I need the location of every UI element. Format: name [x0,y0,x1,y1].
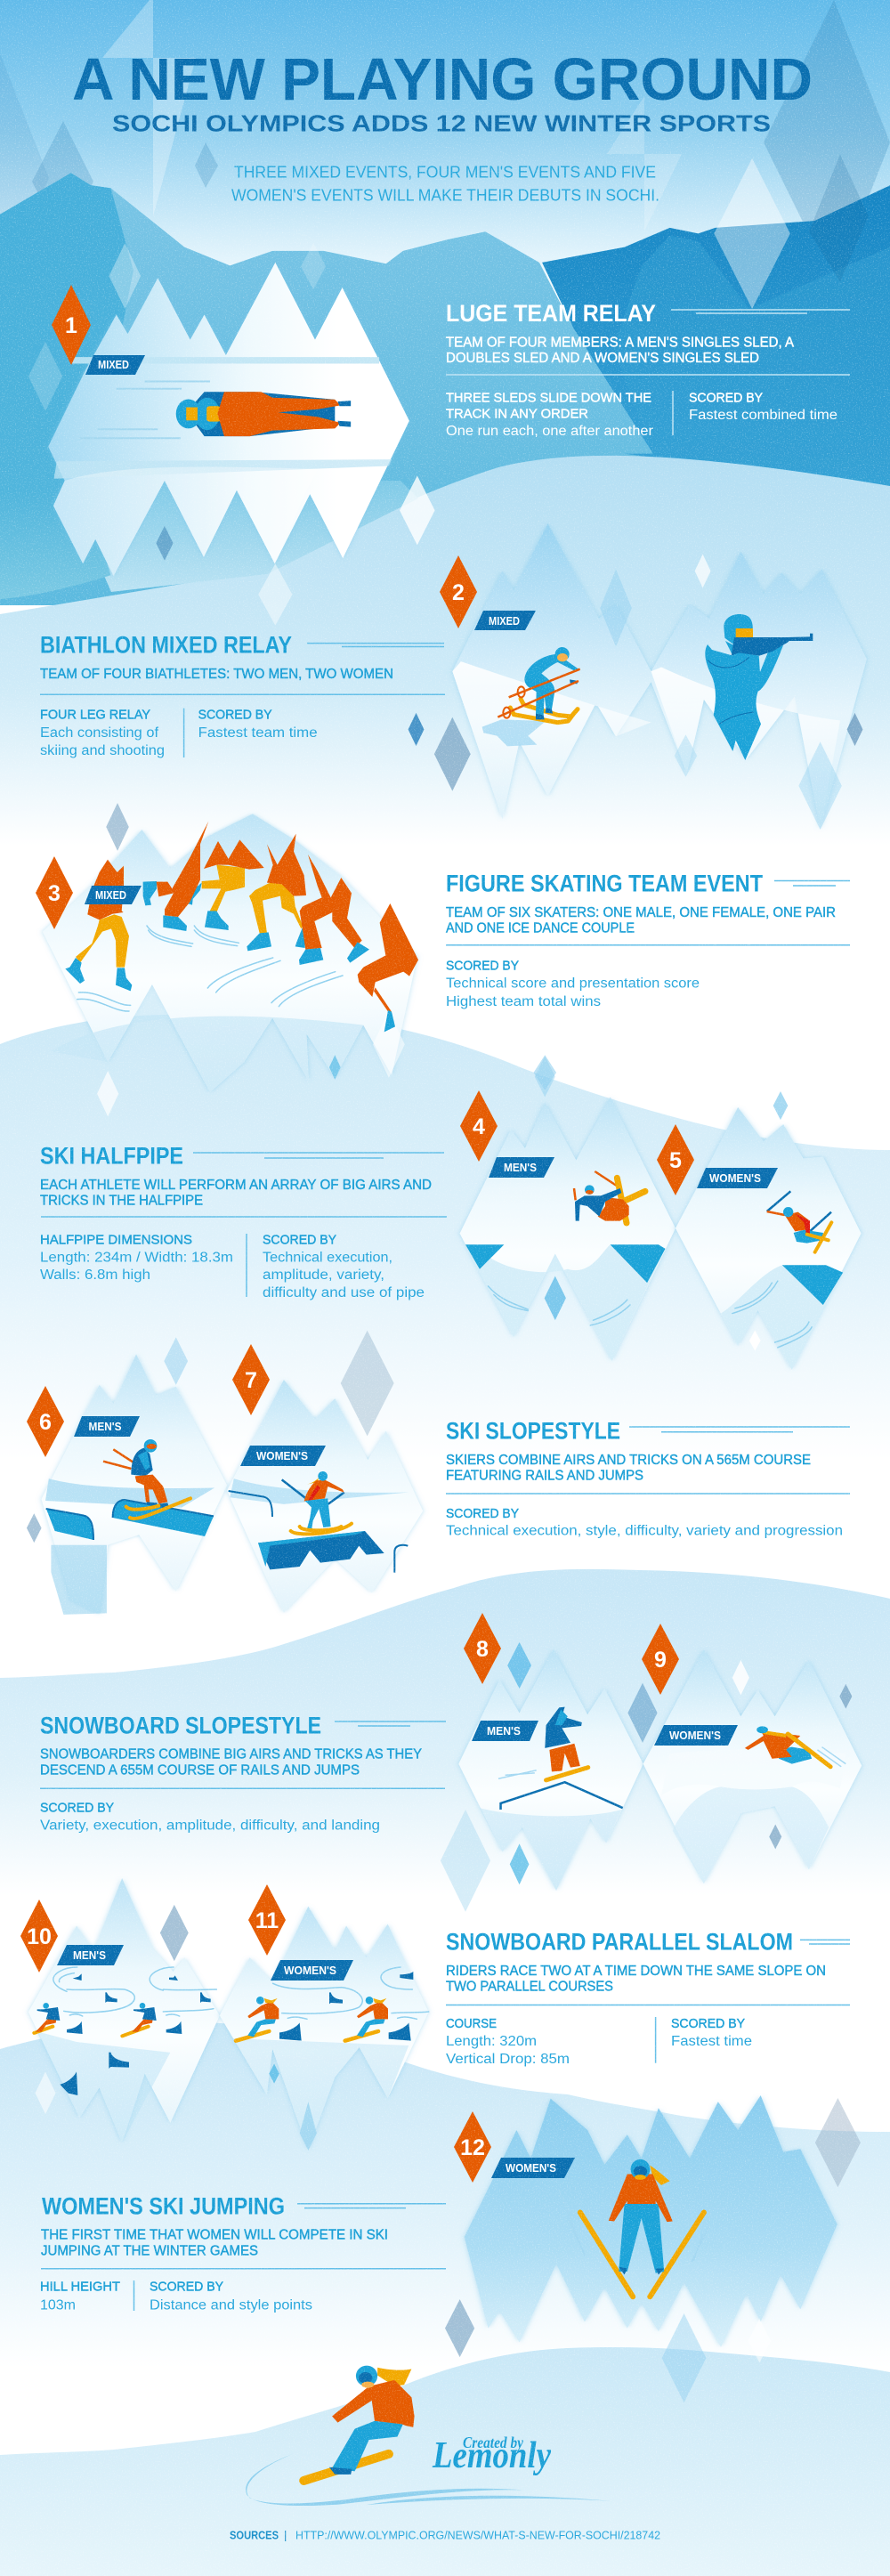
rank badges: 12 [460,2135,485,2160]
panel text: snowboard slopestyle [40,1713,446,1834]
panel text: snowboard slopestyle: DESCEND A 655M COURSE OF RAILS AND JUMPS [40,1762,360,1778]
illustration: snowboard slopestyle panels [441,1642,862,1912]
panel text: biathlon mixed relay: SCORED BY [198,708,272,723]
logo: created by lemonly: Created by [463,2434,524,2451]
panel text: snowboard parallel slalom: Fastest time [671,2034,752,2049]
icon: slalom riders men [34,2003,157,2036]
category tags: MEN'S [73,1948,106,1962]
rank badges [20,285,694,2183]
icon: slopestyle rails [46,1491,408,1573]
panel text: luge team relay: Fastest combined time [689,408,837,423]
category tags [57,355,778,2178]
panel text: women's ski jumping: 103m [40,2297,76,2313]
rank badges: 5 [669,1148,682,1173]
panel text: figure skating team event [446,870,850,1009]
panel text: biathlon mixed relay: FOUR LEG RELAY [40,708,150,723]
icon: luge athlete [176,392,351,436]
panel text: luge team relay: TRACK IN ANY ORDER [446,406,588,422]
rank badges: 3 [48,881,61,906]
rank badges: 4 [473,1114,485,1139]
icon: six figure skaters [65,822,418,1032]
panel text: ski halfpipe: SKI HALFPIPE [40,1143,183,1170]
rank badges: 6 [39,1410,52,1435]
panel text: luge team relay: LUGE TEAM RELAY [446,300,656,327]
panel text: biathlon mixed relay [40,632,445,758]
panel text: biathlon mixed relay: Each consisting of [40,725,159,741]
panel text: snowboard parallel slalom: TWO PARALLEL COURSES [446,1980,613,1995]
icon: slalom course marks [53,1967,429,2095]
panel text: women's ski jumping: WOMEN'S SKI JUMPING [42,2192,285,2219]
category tags: WOMEN'S [709,1171,761,1185]
rank badges: 1 [65,313,77,338]
icon: slopestyle skier women [282,1471,352,1534]
intro text: WOMEN'S EVENTS WILL MAKE THEIR DEBUTS IN SOCHI. [231,187,659,205]
category tags: WOMEN'S [284,1964,336,1977]
illustration: snowboard parallel slalom panels [28,1878,429,2151]
panel text: ski halfpipe [40,1143,447,1300]
panel text: figure skating team event: Technical score and presentation score [446,976,700,992]
sources: | [284,2528,287,2541]
panel text: snowboard parallel slalom: Length: 320m [446,2034,537,2049]
illustration: snowboarder and swoosh [246,2366,612,2506]
panel text: ski halfpipe: Walls: 6.8m high [40,1268,150,1283]
panel text: women's ski jumping: Distance and style points [150,2297,312,2313]
mountains [0,154,890,605]
panel text: ski slopestyle [446,1417,850,1539]
illustration: luge panel [48,263,409,576]
panel text: ski halfpipe: amplitude, variety, [263,1268,384,1283]
panel text: luge team relay: One run each, one after another [446,424,653,439]
panel text: figure skating team event: AND ONE ICE DANCE COUPLE [446,921,635,936]
category tags: MIXED [489,614,520,628]
panel text: snowboard parallel slalom: COURSE [446,2016,497,2031]
category tags: MEN'S [504,1161,537,1174]
panel text: ski halfpipe: difficulty and use of pipe [263,1285,425,1300]
snow wave 2 [0,1013,890,1460]
icon: snowboarder men [545,1707,588,1780]
panel text: women's ski jumping: JUMPING AT THE WINTER GAMES [41,2244,258,2259]
panel text: luge team relay: TEAM OF FOUR MEMBERS: A MEN'S SINGLES SLED, A [446,335,794,351]
panel text: ski halfpipe: TRICKS IN THE HALFPIPE [40,1193,203,1209]
sky diamonds [0,0,890,285]
snow wave 4 [0,2022,890,2368]
panel text: snowboard parallel slalom: SNOWBOARD PARALLEL SLALOM [446,1928,793,1955]
peaks behind luge panel [62,481,418,592]
illustration: figure skating panel [43,803,556,1092]
panel text: ski slopestyle: SKIERS COMBINE AIRS AND TRICKS ON A 565M COURSE [446,1453,811,1468]
panel text: ski slopestyle: SCORED BY [446,1506,519,1521]
illustration: ski slopestyle panels [27,1331,423,1615]
panel text: ski halfpipe: Technical execution, [263,1250,392,1265]
panel text: women's ski jumping: HILL HEIGHT [40,2279,120,2295]
rank badges: 11 [255,1908,279,1933]
panel text: biathlon mixed relay: skiing and shooting [40,743,165,758]
category tags: WOMEN'S [669,1729,721,1742]
decorative diamonds upper [28,243,435,626]
left mountain [0,173,134,599]
subtitle: SOCHI OLYMPICS ADDS 12 NEW WINTER SPORTS [112,112,771,137]
rank badges: 2 [452,580,465,605]
sources: HTTP://WWW.OLYMPIC.ORG/NEWS/WHAT-S-NEW-FOR-SOCHI/218742 [295,2528,660,2541]
rank badges: 10 [27,1924,52,1949]
icon: halfpipe skier men [574,1171,645,1223]
rank badges: 9 [654,1648,667,1673]
illustration: ski halfpipe panels [97,1057,862,1370]
icon: slalom riders women [236,1997,388,2041]
category tags: MIXED [98,358,129,371]
panel text: figure skating team event: Highest team total wins [446,994,601,1009]
logo: created by lemonly: Lemonly [432,2435,551,2476]
panel text: luge team relay: DOUBLES SLED AND A WOMEN'S SINGLES SLED [446,351,759,366]
panel text: luge team relay: SCORED BY [689,390,763,406]
panel text: women's ski jumping: SCORED BY [150,2279,223,2295]
panel text: biathlon mixed relay: BIATHLON MIXED RELAY [40,632,292,659]
category tags: WOMEN'S [256,1449,308,1462]
panel text: ski halfpipe: SCORED BY [263,1232,336,1248]
illustration: women's ski jumping panel [300,2095,861,2402]
panel text: luge team relay: THREE SLEDS SLIDE DOWN THE [446,390,651,406]
category tags: WOMEN'S [506,2161,556,2175]
panel text: snowboard parallel slalom: RIDERS RACE TWO AT A TIME DOWN THE SAME SLOPE ON [446,1964,826,1979]
panel text: ski slopestyle: SKI SLOPESTYLE [446,1417,620,1444]
icon: snowboarder women [745,1726,830,1767]
panel text: ski slopestyle: FEATURING RAILS AND JUMPS [446,1469,643,1484]
icon: biathlete shooting [705,614,813,760]
panel text: ski halfpipe: HALFPIPE DIMENSIONS [40,1232,192,1248]
panel text: snowboard parallel slalom [446,1928,850,2067]
intro text [231,164,659,205]
icon: cross-country skier [482,647,580,746]
panel text: ski halfpipe: EACH ATHLETE WILL PERFORM AN ARRAY OF BIG AIRS AND [40,1178,432,1193]
panel text: snowboard parallel slalom: Vertical Drop: 85m [446,2052,570,2067]
rank badges: 7 [245,1368,257,1393]
category tags: MEN'S [487,1724,521,1738]
category tags: MIXED [95,888,126,902]
snow hill 1 [0,456,890,855]
icon: halfpipe skier women [767,1191,831,1252]
background: sky [0,0,890,374]
panel text: figure skating team event: SCORED BY [446,958,519,974]
panel text: snowboard parallel slalom: SCORED BY [671,2016,745,2031]
panel text: figure skating team event: TEAM OF SIX SKATERS: ONE MALE, ONE FEMALE, ONE PAIR [446,905,836,920]
sources: SOURCES [230,2528,279,2541]
intro text: THREE MIXED EVENTS, FOUR MEN'S EVENTS AND FIVE [234,164,656,182]
illustration: biathlon panel [409,523,867,830]
title: A NEW PLAYING GROUND [72,46,813,113]
panel text: biathlon mixed relay: TEAM OF FOUR BIATHLETES: TWO MEN, TWO WOMEN [40,667,393,682]
category tags: MEN'S [89,1420,122,1433]
snow wave 3 [0,1569,890,1896]
panel text: snowboard slopestyle: SCORED BY [40,1800,114,1815]
icon: ski jumper [580,2159,704,2297]
panel text: snowboard slopestyle: SNOWBOARD SLOPESTYLE [40,1713,321,1739]
panel text: luge team relay [446,300,850,439]
panel text: snowboard slopestyle: SNOWBOARDERS COMBINE BIG AIRS AND TRICKS AS THEY [40,1747,422,1762]
panel text: biathlon mixed relay: Fastest team time [198,725,318,741]
snow wave 5 [0,2347,890,2576]
rank badges: 8 [476,1637,489,1662]
panel text: snowboard slopestyle: Variety, execution, amplitude, difficulty, and landing [40,1819,380,1834]
panel text: women's ski jumping [40,2192,446,2313]
panel text: ski slopestyle: Technical execution, style, difficulty, variety and progression [446,1524,843,1539]
panel text: ski halfpipe: Length: 234m / Width: 18.3m [40,1250,233,1265]
icon: slopestyle skier men [103,1439,190,1519]
panel text: women's ski jumping: THE FIRST TIME THAT WOMEN WILL COMPETE IN SKI [41,2228,388,2243]
panel text: figure skating team event: FIGURE SKATING TEAM EVENT [446,870,763,896]
